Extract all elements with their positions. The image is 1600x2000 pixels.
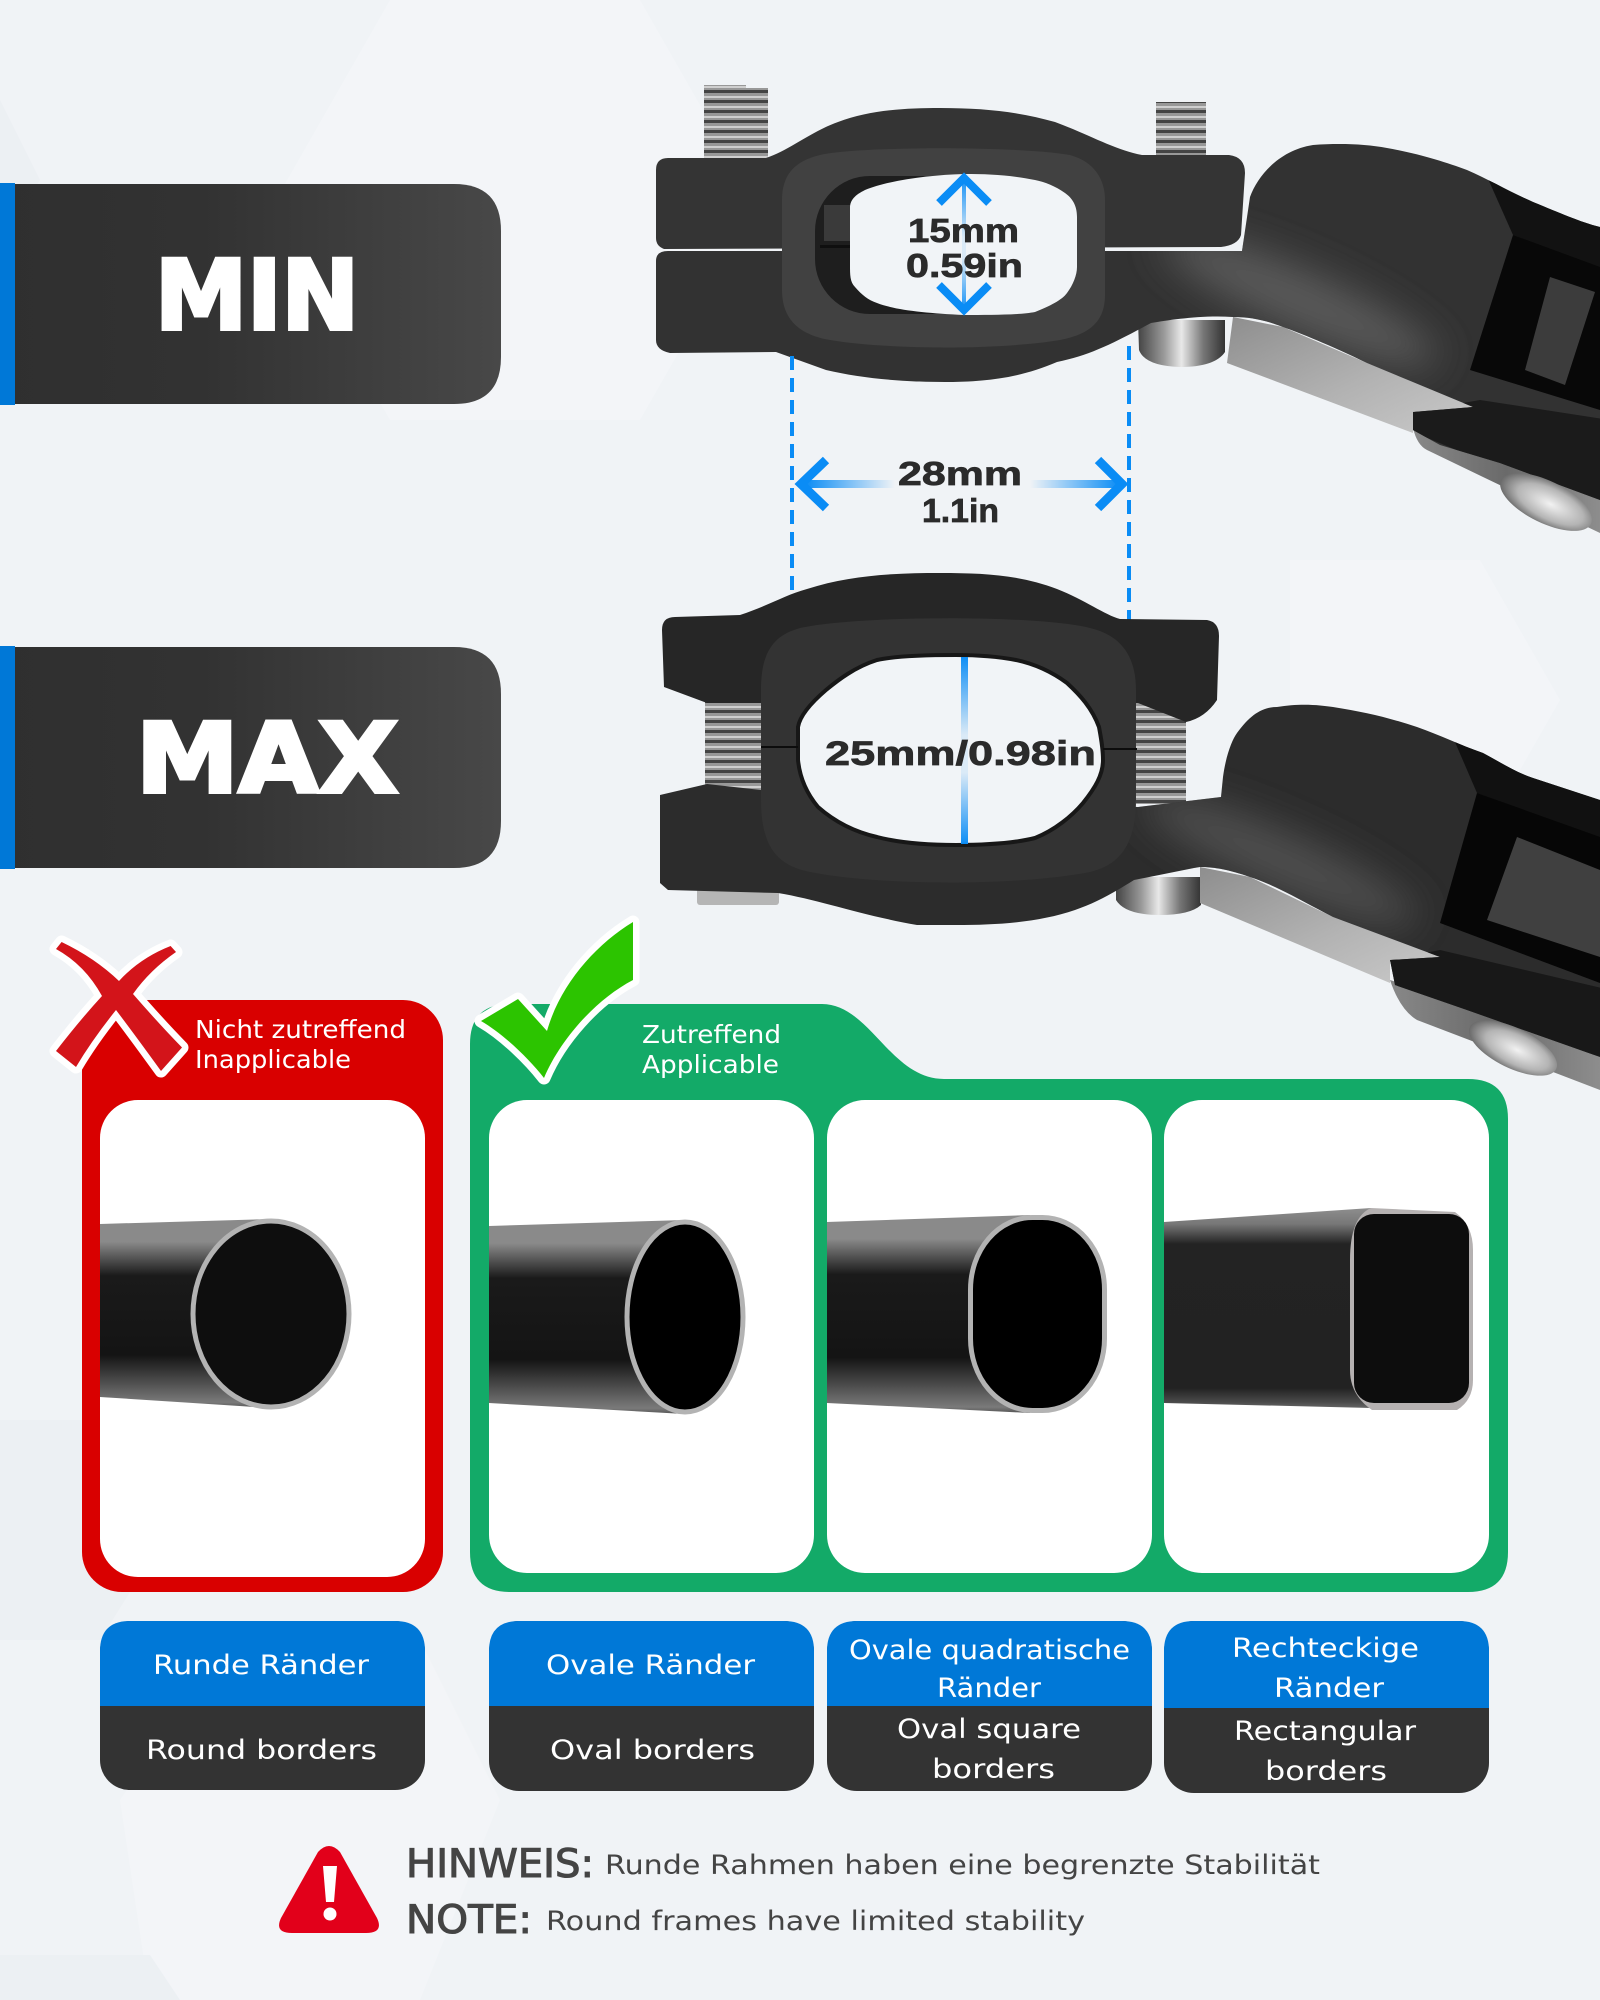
caption: rectangular borders: Rectangular xyxy=(1234,1716,1417,1747)
label: MIN: MIN xyxy=(155,240,359,352)
label: MAX: MAX xyxy=(136,703,398,815)
panel: inapplicable xyxy=(82,1000,443,1592)
caption: oval borders: Oval borders xyxy=(550,1735,755,1766)
caption: oval borders xyxy=(489,1621,814,1791)
tube: rectangular xyxy=(1164,1208,1473,1410)
caption: oval square borders: Ovale quadratische xyxy=(849,1635,1130,1666)
dimension: 15mm height: 15mm xyxy=(908,212,1019,249)
label: MAX xyxy=(0,646,501,869)
caption: rectangular borders: borders xyxy=(1265,1756,1387,1787)
tube: oval square xyxy=(827,1215,1104,1413)
dimension: 15mm height: 0.59in xyxy=(906,247,1023,284)
tube: oval xyxy=(489,1220,743,1414)
caption: round borders: Round borders xyxy=(146,1735,377,1766)
caption: rectangular borders: Ränder xyxy=(1274,1673,1385,1704)
label: MIN xyxy=(0,183,501,405)
dimension: 25mm diameter: 25mm/0.98in xyxy=(825,735,1096,773)
note text: Round frames have limited stability xyxy=(546,1906,1085,1937)
icon: warning triangle xyxy=(279,1846,379,1933)
dimension: 28mm width: 1.1in xyxy=(922,492,999,529)
dimension: 28mm width: 28mm xyxy=(898,455,1022,492)
clamp: minimum opening xyxy=(656,85,1600,543)
caption: rectangular borders xyxy=(1164,1621,1489,1793)
dimension: 15mm height xyxy=(906,175,1023,313)
panel: applicable: Applicable xyxy=(642,1050,779,1079)
dimension: 25mm diameter xyxy=(825,657,1096,844)
caption: oval square borders: Oval square xyxy=(897,1714,1081,1745)
panel: applicable: Zutreffend xyxy=(642,1020,781,1049)
tube: round xyxy=(100,1219,349,1408)
caption: oval square borders xyxy=(827,1621,1152,1791)
caption: round borders xyxy=(100,1621,425,1790)
caption: oval square borders: Ränder xyxy=(937,1673,1042,1704)
panel: inapplicable: Inapplicable xyxy=(195,1045,351,1074)
panel: inapplicable: Nicht zutreffend xyxy=(195,1015,406,1044)
dashed guide lines xyxy=(792,346,1129,620)
caption: rectangular borders: Rechteckige xyxy=(1232,1633,1419,1664)
caption: oval borders: Ovale Ränder xyxy=(546,1650,756,1681)
caption: round borders: Runde Ränder xyxy=(153,1650,370,1681)
icon: green check xyxy=(481,922,633,1078)
note text: Runde Rahmen haben eine begrenzte Stabilität xyxy=(605,1850,1320,1881)
note text xyxy=(406,1842,1320,1943)
panel: applicable xyxy=(470,1004,1508,1592)
dimension: 28mm width xyxy=(801,455,1122,529)
caption: oval square borders: borders xyxy=(932,1754,1055,1785)
note text: HINWEIS: xyxy=(406,1842,594,1887)
clamp: maximum opening xyxy=(660,573,1600,1090)
icon: red cross xyxy=(56,942,182,1071)
note text: NOTE: xyxy=(406,1898,532,1943)
